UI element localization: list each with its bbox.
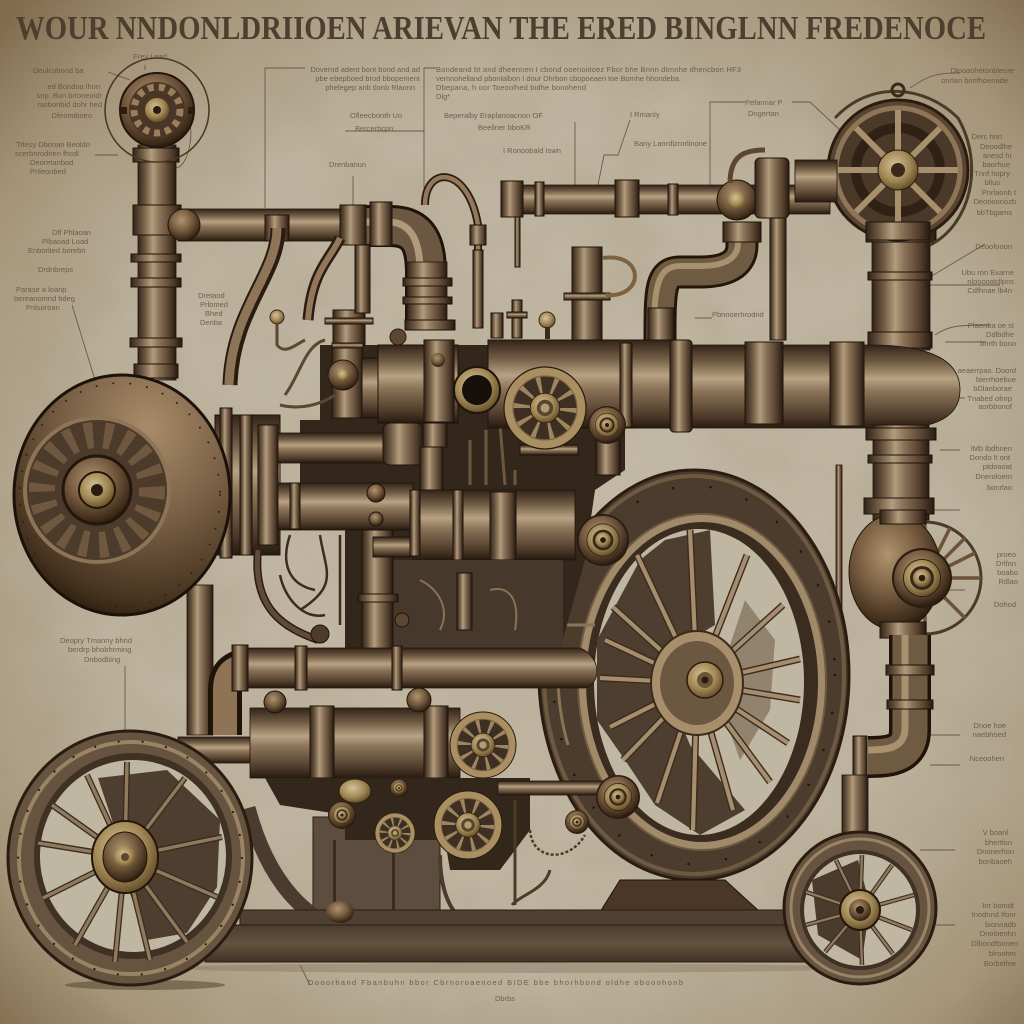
top-right flywheel: [828, 84, 972, 245]
big wheel: [539, 470, 849, 880]
annotation text: right column: Dneroloem: [975, 472, 1012, 481]
left sphere housing: [14, 375, 230, 615]
round window: [454, 367, 500, 413]
annotation text: right column: Inr bomdt: [982, 901, 1015, 910]
annotation text: top left: scerbnrodnen fhcdl: [15, 149, 79, 158]
lower right pipe and elbow: [836, 465, 934, 835]
annotation text: lower left and bottom: berdrp bhobhrming: [68, 645, 131, 654]
annotation text: left middle: [14, 228, 228, 327]
top-left gauge: [105, 58, 209, 162]
annotation text: top left: Deulcubond ba: [33, 66, 84, 75]
annotation text: top centre: Ofleecbonth Uo: [350, 111, 402, 120]
annotation text: top left: Frey Lead: [133, 52, 167, 61]
annotation text: top centre: vemnohelland pbonlalbon I dour Dhrbon cbopoeaen toe Bomhe hhondeba.: [436, 74, 681, 83]
annotation text: left middle: Prlomed: [200, 300, 228, 309]
annotation text: lower left and bottom: Dooorhand Fbanbuhn bbor Cbrnoroaenoed BIDE bbe bhorhbond oldhe obooohonb: [308, 978, 683, 987]
annotation text: right column: Tnabed ofnrp: [967, 394, 1012, 403]
annotation text: right column: bonbaoeh: [979, 857, 1012, 866]
upper-left horizontal pipe and elbow: [168, 202, 452, 327]
annotation text: right column: anesd hr: [983, 151, 1013, 160]
annotation text: lower left and bottom: [60, 310, 764, 1003]
annotation text: left middle: Pnlsoroan: [26, 303, 60, 312]
annotation text: right column: Pfaenba oe st: [968, 321, 1015, 330]
annotation text: right column: [941, 66, 1018, 968]
annotation text: top centre: I Rmanly: [630, 110, 660, 119]
left sphere flanges: [215, 408, 280, 558]
lower cylinder assembly: [178, 688, 516, 778]
annotation text: top centre: phelegep anb tlonb Rlaonn: [325, 83, 415, 92]
annotation text: right column: Dondo lt ont: [970, 453, 1011, 462]
annotation text: right column: bllus: [985, 178, 1000, 187]
annotation text: top centre: [310, 65, 783, 169]
annotation text: top centre: Dngertan: [748, 109, 779, 118]
lower horizontal cylinder: [278, 483, 575, 560]
annotation text: right column: bbTbgams: [977, 208, 1012, 217]
annotation text: right column: Dlbondfbonen: [971, 939, 1018, 948]
annotation text: right column: Dlooaohetonbleure: [951, 66, 1014, 75]
right stem pipe top: [866, 228, 936, 350]
upper left column: [130, 145, 182, 380]
annotation text: top centre: Pefannar P: [745, 98, 783, 107]
annotation text: right column: Dnoe hoe: [973, 721, 1006, 730]
left bottom wheel: [8, 731, 252, 985]
annotation text: right column: bionnadb: [985, 920, 1016, 929]
annotation text: right column: Cdfhnae lb4n: [967, 286, 1012, 295]
annotation text: right column: Ddlbdhe: [986, 330, 1014, 339]
annotation text: left middle: Drdnbreps: [38, 265, 73, 274]
annotation text: right column: Deonoonozb: [973, 197, 1016, 206]
central machinery body: [270, 245, 635, 650]
annotation text: right column: Pnrlaonb t: [982, 188, 1017, 197]
annotation text: right column: proeo: [997, 550, 1016, 559]
central lower wiring and columns: [257, 530, 563, 650]
annotation text: lower left and bottom: Pbnnoerhrodnd: [712, 310, 764, 319]
right stem pipe middle and elbow: [600, 340, 960, 520]
annotation text: right column: Deoodlhe: [980, 142, 1012, 151]
right bottom wheel: [784, 832, 936, 984]
annotation text: left middle: Bhed: [205, 309, 223, 318]
annotation text: top left: Dfeomiboeo: [52, 111, 92, 120]
annotation text: top left: snp. Bon brtoneoidr: [37, 91, 102, 100]
left vertical support pipe: [187, 585, 213, 735]
annotation text: right column: V boanl: [983, 828, 1008, 837]
annotation text: right column: aeaerrpas. Doord: [958, 366, 1016, 375]
annotation text: right column: Tnnf hopry: [974, 169, 1010, 178]
annotation text: right column: Inodnnd Ifonr: [972, 910, 1017, 919]
annotation text: left middle: Dretaod: [198, 291, 225, 300]
annotation text: right column: Derc hon: [972, 132, 1002, 141]
annotation text: right column: blroohm: [989, 949, 1016, 958]
annotation text: top centre: Dlg*: [436, 92, 450, 101]
annotation text: right column: onrlan bonfhoenade: [941, 76, 1008, 85]
annotation text: lower left and bottom: Dnbodbing: [84, 655, 120, 664]
annotation text: right column: Dnoloenhn: [980, 929, 1016, 938]
annotation text: left middle: Parase a loanp: [16, 285, 66, 294]
annotation text: right column: boabo: [997, 568, 1018, 577]
annotation text: left middle: Plbaoad Load: [42, 237, 88, 246]
annotation text: top left: Trlesy Dbonan Beoldo: [16, 140, 90, 149]
annotation text: top centre: pbe ebepboed brod bbopement: [315, 74, 421, 83]
boiler pipe left end: [488, 340, 692, 432]
gooseneck pipe: [425, 177, 486, 328]
annotation text: top centre: Beeliner bboKR: [478, 123, 531, 132]
annotation text: right column: bierrhoebue: [976, 375, 1016, 384]
upper horizontal cylinder: [278, 423, 447, 490]
annotation text: right column: nlooooatdlpns: [967, 277, 1014, 286]
annotation text: top centre: Beperalby Eraplanoacnon OF: [444, 111, 543, 120]
annotation text: top left: [15, 52, 167, 176]
annotation text: right column: Dnonerhon: [977, 847, 1014, 856]
lower pinion gears: [265, 775, 640, 905]
frame and base rail: [65, 778, 850, 990]
annotation text: top centre: Bercerbcpn: [355, 124, 393, 133]
annotation text: top centre: Dovernd adent bont bond and ad: [310, 65, 420, 74]
annotation text: right column: ptdoaoat: [983, 462, 1013, 471]
annotation text: right column: Nceoohen: [970, 754, 1004, 763]
annotation text: right column: bDlanborae: [973, 384, 1012, 393]
annotation text: right column: bonrlao: [987, 483, 1012, 492]
annotation text: right column: Borbelfne: [984, 959, 1016, 968]
annotation text: right column: baorhue: [982, 160, 1010, 169]
annotation text: top centre: Bondeand bt and dheennen I cbond ooenoiitoez Fbor bhe Bnnn dtmnhe dhencbon HF3: [436, 65, 741, 74]
annotation text: top left: ed Bondoa lhon: [47, 82, 100, 91]
annotation text: right column: naebhoed: [973, 730, 1006, 739]
annotation text: right column: aorbbonof: [978, 402, 1013, 411]
annotation text: right column: Drlfnn: [996, 559, 1016, 568]
annotation text: left middle: Denba: [200, 318, 223, 327]
annotation text: right column: bhertlon: [985, 838, 1012, 847]
annotation text: right column: bhrth bono: [980, 339, 1016, 348]
thin curved pipe left: [229, 228, 340, 385]
annotation text: left middle: Dff Phlaoan: [52, 228, 91, 237]
annotation text: right column: IMb lbdhnen: [971, 444, 1012, 453]
annotation text: top left: Deoretanbod: [30, 158, 73, 167]
annotation text: left middle: Enborlted borebn: [28, 246, 86, 255]
annotation text: top centre: I Ronoobald Iswn: [503, 146, 561, 155]
annotation text: top left: rasbonbid dohr hed: [37, 100, 102, 109]
central gears: [504, 367, 629, 597]
annotation text: top centre: Drenbanun: [329, 160, 366, 169]
right lower ball with wheel: [849, 510, 981, 638]
annotation text: top left: Pnleonbed: [30, 167, 66, 176]
annotation text: right column: Rdlao: [998, 577, 1018, 586]
elbow pipe to centre right: [648, 222, 761, 342]
annotation text: right column: Deoofooon: [975, 242, 1012, 251]
annotation text: lower left and bottom: Deopry Tmanny bhnd: [60, 636, 132, 645]
annotation text: left middle: bereanomnd bdeg: [14, 294, 75, 303]
annotation text: right column: Ubu ron Exarne: [961, 268, 1014, 277]
top horizontal pipe: [501, 150, 837, 340]
annotation text: lower left and bottom: Dbrbs: [495, 994, 515, 1003]
annotation text: right column: Dohod: [994, 600, 1016, 609]
lower curved pipe: [225, 645, 597, 735]
annotation text: top centre: Bany Lanrdlzrorlinone: [634, 139, 707, 148]
annotation text: top centre: Dbepana, h oor Toeoolhed bidhe bonohend: [436, 83, 586, 92]
